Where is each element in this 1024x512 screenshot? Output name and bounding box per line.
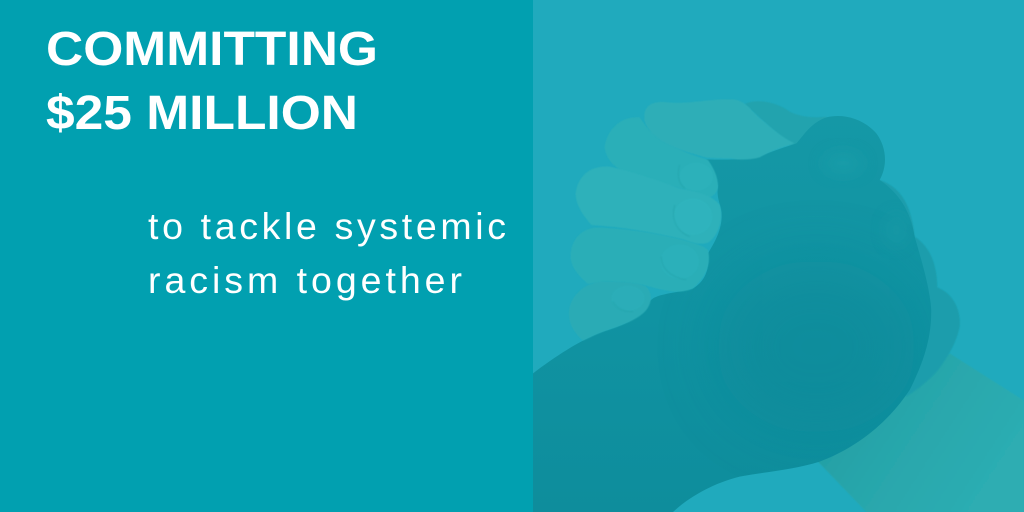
back hand knuckle at top [745, 101, 826, 147]
title: $25 MILLION [46, 87, 358, 140]
light hand second finger [605, 117, 718, 197]
light hand top finger [644, 99, 795, 159]
back hand fingers at right [866, 180, 960, 397]
subtitle text: racism together [148, 259, 462, 301]
light hand fourth finger [571, 228, 709, 291]
light forearm [818, 353, 1024, 512]
panel: clasped hands photo [533, 0, 1024, 512]
light hand small finger [569, 282, 651, 341]
panel: solid teal background [0, 0, 533, 512]
dark hand [533, 113, 966, 512]
finger nails [611, 163, 713, 311]
light hand third finger [576, 166, 721, 244]
subtitle text [148, 205, 506, 301]
title: COMMITTING [46, 23, 378, 76]
title [46, 23, 378, 140]
subtitle text: to tackle systemic [148, 205, 506, 247]
finger creases [613, 165, 690, 312]
